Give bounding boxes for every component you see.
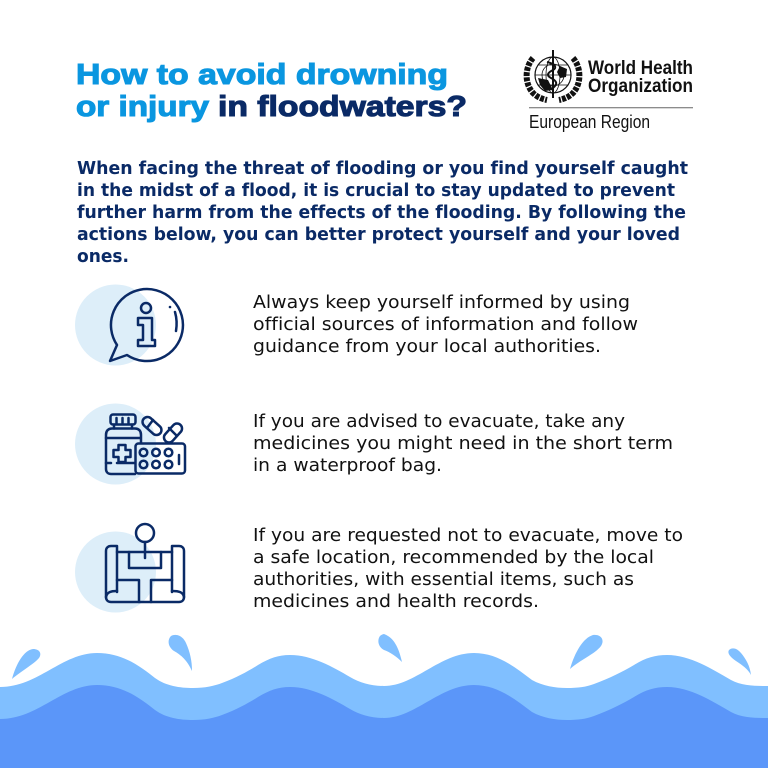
intro text: further harm from the effects of the flooding. By following the <box>77 202 686 223</box>
text: move to safe location: a safe location, recommended by the local <box>253 547 654 568</box>
logo name <box>588 57 693 97</box>
icon: information speech bubble <box>75 284 183 366</box>
text: evacuate with medicines: medicines you might need in the short term <box>253 433 673 454</box>
water drops <box>12 634 751 679</box>
intro text: in the midst of a flood, it is crucial to stay updated to prevent <box>77 180 675 201</box>
title: in floodwaters? <box>218 91 467 123</box>
text: move to safe location: authorities, with essential items, such as <box>253 569 634 590</box>
logo name: Organization <box>588 75 693 97</box>
logo region: European Region <box>529 112 650 132</box>
text: evacuate with medicines: in a waterproof bag. <box>253 455 442 476</box>
text: move to safe location: medicines and health records. <box>253 591 539 612</box>
dark wave <box>0 685 768 768</box>
title: How to avoid drowning <box>76 59 448 91</box>
text: evacuate with medicines <box>253 411 673 476</box>
text: stay informed: guidance from your local authorities. <box>253 336 601 357</box>
text: move to safe location <box>253 525 683 612</box>
title <box>76 59 467 123</box>
light wave <box>0 653 768 760</box>
text: stay informed: official sources of information and follow <box>253 314 638 335</box>
title: or injury <box>76 91 209 123</box>
intro text: actions below, you can better protect yourself and your loved <box>77 224 680 245</box>
icon: medicines <box>75 404 185 484</box>
logo name: World Health <box>588 57 693 79</box>
icon: WHO emblem <box>527 50 579 100</box>
intro text <box>77 158 688 267</box>
intro text: When facing the threat of flooding or you find yourself caught <box>77 158 688 179</box>
text: move to safe location: If you are requested not to evacuate, move to <box>253 525 683 546</box>
text: stay informed <box>253 292 638 357</box>
WHO logo <box>527 50 693 132</box>
text: stay informed: Always keep yourself informed by using <box>253 292 630 313</box>
intro text: ones. <box>77 246 129 267</box>
text: evacuate with medicines: If you are advised to evacuate, take any <box>253 411 625 432</box>
icon: map with location pin <box>75 524 184 612</box>
